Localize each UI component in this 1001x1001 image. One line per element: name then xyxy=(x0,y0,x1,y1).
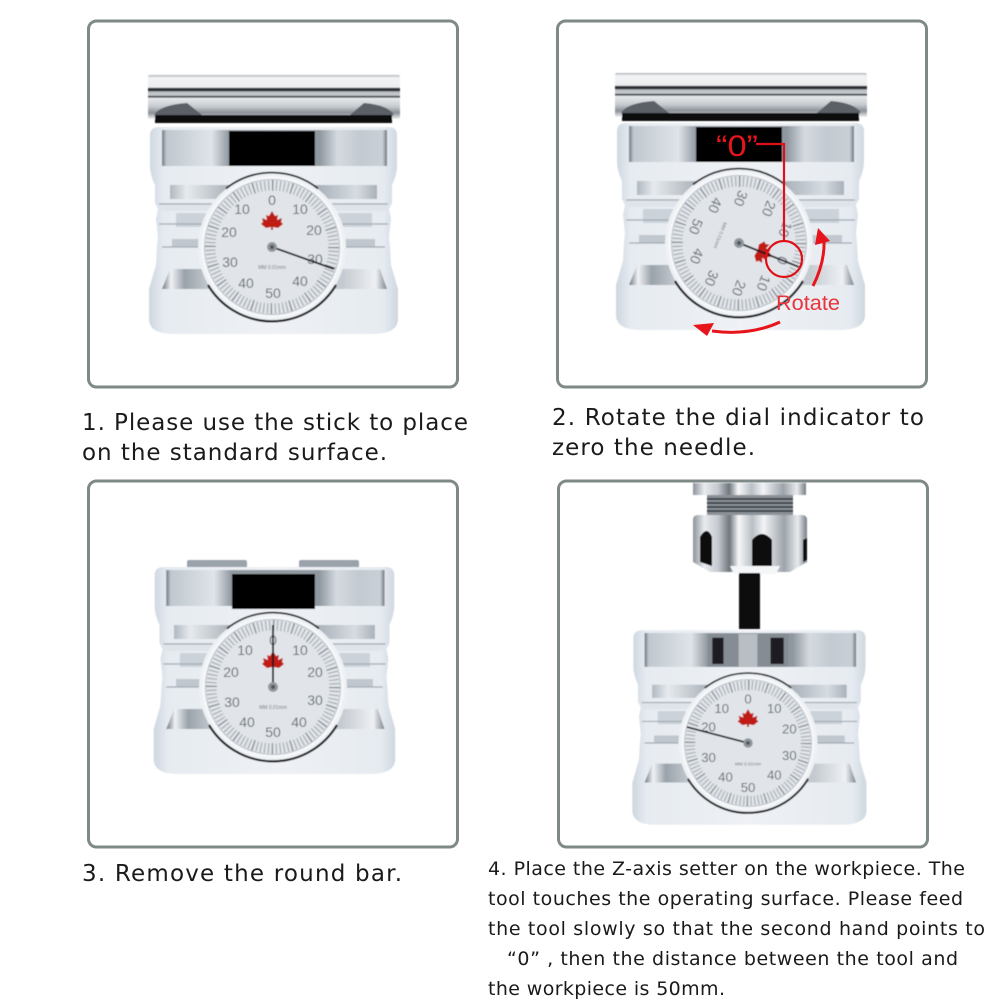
round bar xyxy=(615,73,867,121)
dial numerals: 10 xyxy=(714,701,729,716)
dial numerals: 20 xyxy=(307,664,323,680)
dial numerals: 30 xyxy=(701,750,716,765)
device: step 4 tool holder and collet nut xyxy=(693,483,807,629)
dial numerals: 40 xyxy=(718,770,733,785)
dial numerals: 20 xyxy=(223,664,239,680)
caption: step 4 xyxy=(488,858,985,1000)
callout: leader line and circle xyxy=(756,144,802,277)
rotated dial face: 10 xyxy=(775,219,796,240)
rotated dial face: 20 xyxy=(729,278,749,299)
dial numerals: 10 xyxy=(234,201,250,217)
device: step 1 setter with round bar xyxy=(148,75,400,334)
rotated dial face: 10 xyxy=(753,273,774,294)
dial numerals: 40 xyxy=(238,275,254,291)
needle xyxy=(268,625,278,692)
arrow: rotate right side xyxy=(813,228,830,286)
caption: step 4: 4. Place the Z-axis setter on the workpiece. The xyxy=(488,858,965,880)
dial numerals: 10 xyxy=(292,642,308,658)
device: step 2 setter with rotated dial xyxy=(615,73,867,330)
icon: maple leaf xyxy=(262,651,284,670)
label: Rotate: Rotate xyxy=(776,292,840,315)
dial numerals: 10 xyxy=(292,201,308,217)
caption: step 1 xyxy=(82,410,468,466)
rotated dial face: 40 xyxy=(705,195,726,216)
rotated dial face xyxy=(670,176,809,311)
dial numerals: 50 xyxy=(741,780,755,795)
dial numerals: 20 xyxy=(306,222,322,238)
rotated dial face: 40 xyxy=(687,246,707,267)
arrow: rotate bottom xyxy=(693,322,780,336)
rotated dial face: 20 xyxy=(759,199,779,219)
dial numerals: 20 xyxy=(701,720,716,735)
rotated dial face: 0 xyxy=(774,254,791,267)
dial numerals: 20 xyxy=(782,722,797,737)
device: step 4 setter xyxy=(632,630,866,825)
caption: step 2: zero the needle. xyxy=(552,435,755,461)
caption: step 1: on the standard surface. xyxy=(82,440,387,466)
needle xyxy=(267,242,334,269)
caption: step 3: 3. Remove the round bar. xyxy=(82,861,402,887)
dial numerals: 10 xyxy=(767,701,782,716)
callout: red zero mark: “0” xyxy=(716,130,758,163)
dial numerals: 30 xyxy=(222,254,238,270)
dial numerals: MM 0.01mm xyxy=(735,762,761,767)
caption: step 4: the tool slowly so that the second hand points to xyxy=(488,918,985,940)
caption: step 2 xyxy=(552,405,924,461)
dial numerals: 40 xyxy=(767,768,782,783)
panel: step 2 frame xyxy=(558,21,926,387)
needle xyxy=(734,238,799,267)
dial numerals: MM 0.01mm xyxy=(258,265,286,271)
window xyxy=(708,634,788,667)
dial numerals: 10 xyxy=(237,642,253,658)
caption: step 4: “0” , then the distance between the tool and xyxy=(507,948,958,970)
rotated dial face: 30 xyxy=(701,268,722,289)
dial numerals: 20 xyxy=(221,224,237,240)
dial numerals xyxy=(223,632,323,740)
icon: maple leaf xyxy=(738,709,758,727)
dial numerals: 0 xyxy=(744,692,752,707)
dial numerals: 50 xyxy=(265,285,281,301)
dial numerals: 30 xyxy=(307,251,323,267)
icon: maple leaf xyxy=(261,211,283,230)
dial numerals: 30 xyxy=(782,748,797,763)
dial numerals: 0 xyxy=(268,192,276,208)
dial numerals: 40 xyxy=(291,714,307,730)
rotated dial face: MM 0.01mm xyxy=(712,221,728,249)
caption: step 4: tool touches the operating surface. Please feed xyxy=(488,888,963,910)
dial numerals: MM 0.01mm xyxy=(259,705,287,711)
panel: step 1 frame xyxy=(88,21,458,387)
dial numerals: 40 xyxy=(239,714,255,730)
device: step 3 setter without bar xyxy=(154,560,395,774)
rotated dial face: 30 xyxy=(730,188,751,209)
dial numerals: 0 xyxy=(269,632,277,648)
needle xyxy=(687,727,753,748)
dial numerals: 40 xyxy=(292,273,308,289)
dial numerals: 30 xyxy=(224,694,240,710)
panel: step 3 frame xyxy=(88,481,458,847)
caption: step 1: 1. Please use the stick to place xyxy=(82,410,468,436)
caption: step 4: the workpiece is 50mm. xyxy=(488,978,725,1000)
dial numerals xyxy=(221,192,323,301)
dial numerals: 30 xyxy=(307,692,323,708)
top tabs xyxy=(187,560,359,570)
dial numerals: 50 xyxy=(265,724,281,740)
caption: step 2: 2. Rotate the dial indicator to xyxy=(552,405,924,431)
rotated dial face: 50 xyxy=(686,216,706,237)
round bar xyxy=(148,75,400,123)
dial numerals xyxy=(701,692,797,795)
panel: step 4 frame xyxy=(558,481,928,847)
